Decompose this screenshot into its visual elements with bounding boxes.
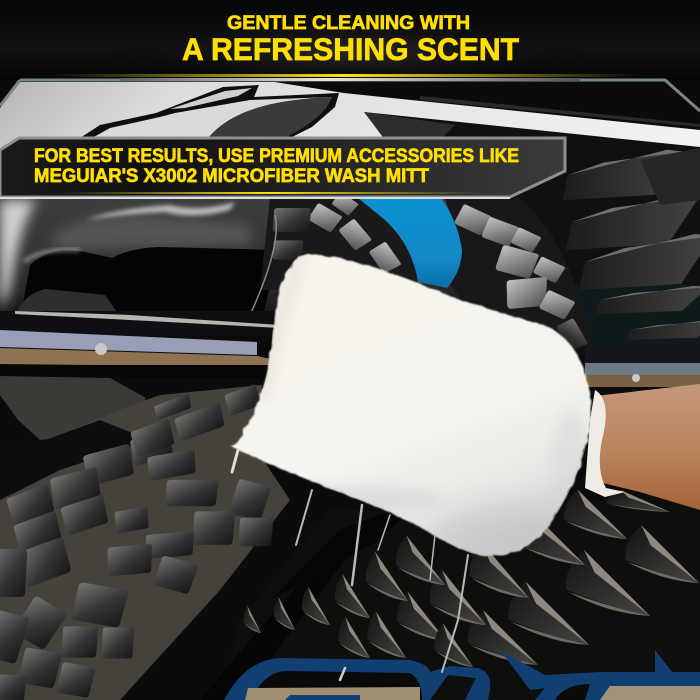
vehicle photo: upper graphic panel — [0, 80, 700, 210]
blue lettering on the body — [224, 650, 700, 700]
eagle head shape — [80, 85, 339, 138]
coil right of blue panel — [445, 198, 592, 353]
banner text — [34, 145, 519, 187]
banner panel — [0, 138, 565, 199]
wash mitt — [232, 254, 591, 563]
lower left grey panel — [0, 376, 146, 440]
lower right feathers — [200, 490, 700, 700]
grey speckled vent — [17, 289, 119, 315]
title: A REFRESHING SCENT — [182, 31, 519, 67]
dark hood body — [0, 198, 460, 330]
coil arch behind mitt — [250, 191, 418, 315]
soap drips — [232, 450, 468, 680]
blue accent panel — [358, 198, 462, 288]
dark roof strip — [262, 80, 700, 130]
top frame with gold and silver line — [0, 74, 700, 111]
title — [182, 12, 519, 67]
header band — [0, 0, 700, 88]
title: GENTLE CLEANING WITH — [227, 12, 470, 34]
banner text: MEGUIAR'S X3002 MICROFIBER WASH MITT — [34, 165, 429, 187]
upper right feathers — [364, 112, 700, 355]
banner text: FOR BEST RESULTS, USE PREMIUM ACCESSORIES LIKE — [34, 145, 519, 167]
lower left scaled coils — [0, 384, 290, 700]
forearm — [585, 384, 700, 510]
door trim and chrome strip — [0, 311, 700, 387]
